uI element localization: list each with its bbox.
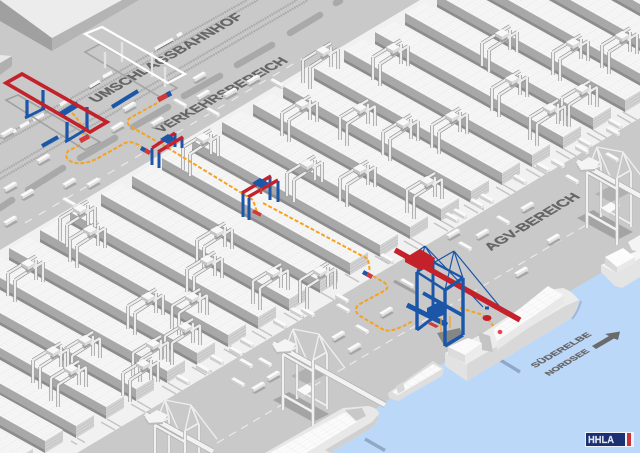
- AGV lane markings: [217, 205, 620, 443]
- small barge: [388, 361, 444, 401]
- label: AGV-Bereich: AGV-BEREICH: [481, 191, 584, 253]
- small building: [0, 55, 12, 75]
- label: Umschlagsbahnhof: UMSCHLAGSBAHNHOF: [86, 11, 247, 105]
- HHLA logo: HHLA: [588, 435, 614, 446]
- road trucks: [0, 72, 284, 228]
- road lane markings: [25, 57, 305, 223]
- yard lane strips: [71, 112, 637, 444]
- red and blue rail gantry crane: [6, 74, 107, 150]
- parking strips: [0, 1, 340, 208]
- AGV area quay: [77, 118, 640, 453]
- label: Nordsee: NORDSEE: [543, 348, 592, 377]
- rail tracks: [0, 0, 308, 179]
- ghost position of rail crane: [85, 27, 185, 97]
- red truck at rail: [158, 93, 171, 100]
- ship shadows on water: [365, 358, 520, 450]
- AGV vehicles: [176, 118, 622, 394]
- blue red yard crane 1: [152, 133, 183, 168]
- road and rail area: [0, 0, 420, 250]
- HHLA logo: [585, 432, 634, 447]
- warehouse building: [0, 0, 139, 51]
- blue train wagons: [42, 91, 138, 146]
- lower container ship: [265, 406, 379, 453]
- white quay crane middle: [273, 329, 385, 427]
- blue red yard crane 2: [242, 176, 278, 220]
- label: Verkehrsbereich: VERKEHRSBEREICH: [151, 55, 292, 135]
- main container ship: [445, 286, 581, 381]
- arrow to North Sea: [592, 332, 620, 349]
- orange transport routes: [66, 103, 497, 333]
- white quay crane right: [577, 147, 640, 245]
- label: Süderelbe: SÜDERELBE: [529, 331, 595, 369]
- AGV red trucks: [141, 148, 372, 277]
- white quay crane left: [145, 400, 217, 453]
- top right barge: [601, 235, 640, 288]
- water: [310, 250, 640, 453]
- trains on rail: [5, 33, 182, 136]
- main ship-to-shore crane: [394, 246, 520, 347]
